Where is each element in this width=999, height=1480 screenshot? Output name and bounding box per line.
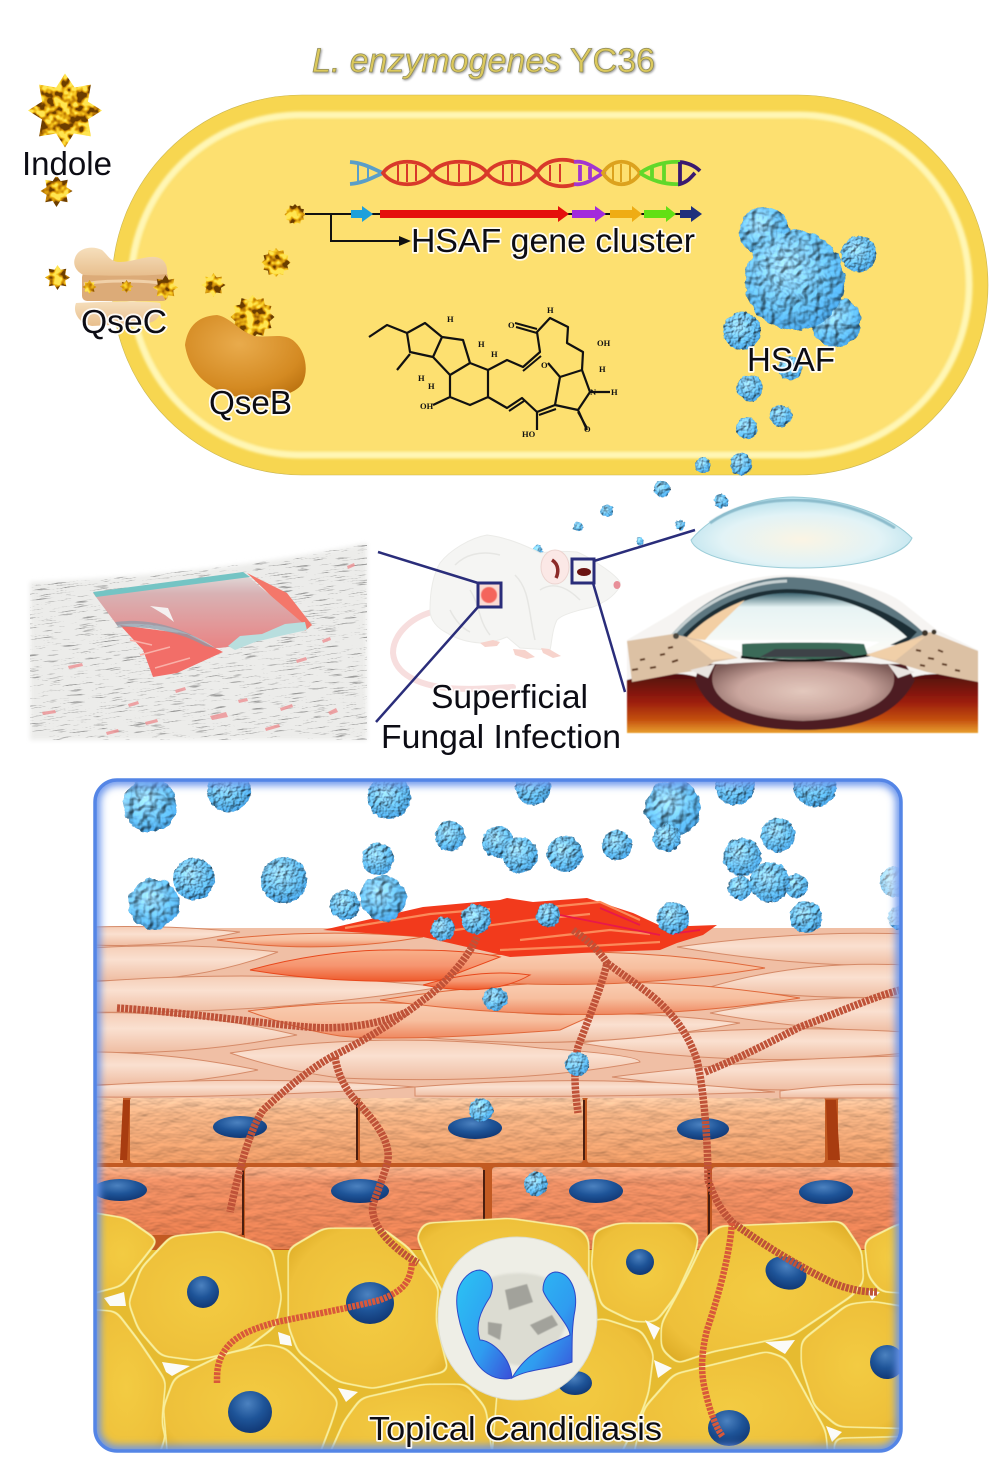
panel: bacterium cell — [112, 95, 988, 475]
icon: contact lens — [691, 497, 912, 568]
fungal hyphae — [117, 930, 900, 1437]
label: HSAF gene cluster: HSAF gene cluster — [411, 223, 695, 260]
icon: QseB protein with indole — [185, 248, 306, 398]
chart: HSAF chemical structure: OH — [597, 338, 611, 348]
chart: HSAF chemical structure: H — [478, 339, 485, 349]
chart: HSAF chemical structure: H — [428, 381, 435, 391]
icon: QseC membrane kinase — [45, 248, 178, 326]
chart: HSAF chemical structure: H — [611, 387, 618, 397]
orange brick cell layer — [93, 1092, 905, 1250]
icon: white rat — [393, 535, 620, 689]
chart: HSAF chemical structure: H — [599, 364, 606, 374]
HSAF particles on the skin — [123, 763, 912, 1196]
panel: eye cross-section — [626, 575, 979, 734]
label: QseC: QseC — [81, 303, 167, 340]
icon: DNA double helix — [350, 160, 700, 186]
label: Superficial Fungal Infection: Fungal Infection — [381, 719, 621, 756]
icon: indole molecules — [28, 74, 102, 207]
callout lines and boxes — [376, 530, 695, 722]
chart: HSAF chemical structure: O — [584, 424, 591, 434]
label: HSAF: HSAF — [747, 341, 835, 378]
chart: HSAF chemical structure — [369, 305, 618, 439]
chart: HSAF chemical structure: H — [491, 349, 498, 359]
chart: HSAF chemical structure: H — [418, 373, 425, 383]
small white gaps between cells — [104, 1290, 880, 1442]
chart: HSAF chemical structure: N — [590, 387, 597, 397]
label: Indole: Indole — [22, 145, 112, 182]
label: QseB: QseB — [209, 384, 292, 421]
chart: HSAF chemical structure: H — [447, 314, 454, 324]
label: Superficial Fungal Infection — [381, 679, 621, 756]
chart: HSAF chemical structure: OH — [420, 401, 434, 411]
backing under adipose layer — [96, 1250, 900, 1450]
pink epidermis layer — [90, 927, 905, 1098]
chart: HSAF chemical structure: O — [508, 320, 515, 330]
infection inflammation — [323, 898, 717, 957]
chart: HSAF chemical structure: HO — [522, 429, 536, 439]
panel: skin wound — [30, 543, 368, 740]
chart: HSAF chemical structure: O — [541, 360, 548, 370]
title: L. enzymogenes YC36 — [312, 42, 655, 80]
label: Superficial Fungal Infection: Superficial — [431, 679, 588, 716]
label: Topical Candidiasis: Topical Candidiasis — [369, 1411, 662, 1448]
fungal cell target — [438, 1237, 597, 1400]
yellow adipose cell layer — [96, 1212, 900, 1450]
chart: HSAF chemical structure: H — [547, 305, 554, 315]
panel: topical candidiasis skin section — [85, 763, 915, 1465]
icon: HSAF particles — [506, 207, 877, 572]
cell nuclei — [93, 1116, 904, 1446]
icon: HSAF gene cluster arrows — [284, 204, 702, 246]
